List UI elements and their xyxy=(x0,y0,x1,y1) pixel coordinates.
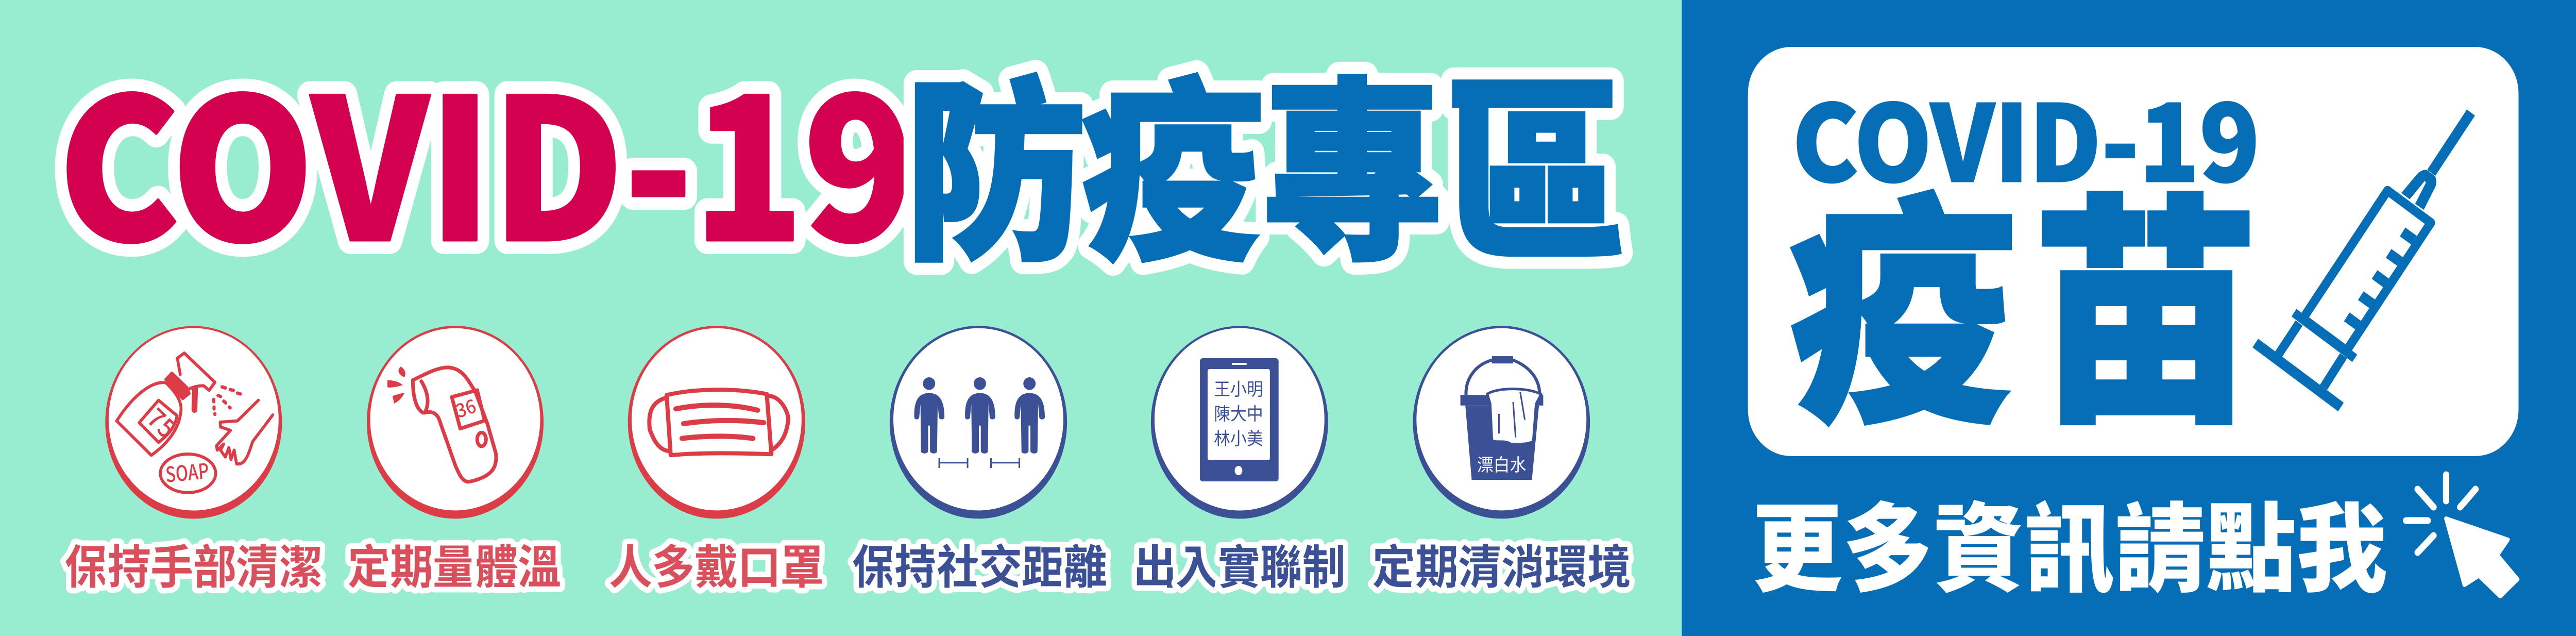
icon: bleach bucket with cloth xyxy=(1413,326,1590,518)
icon: three people keeping distance xyxy=(890,326,1067,518)
panel: vaccine call to action xyxy=(1682,0,2576,636)
labels under icons: 出入實聯制 xyxy=(1133,530,1346,597)
icon: forehead thermometer xyxy=(367,326,544,518)
icon: click cursor xyxy=(2406,475,2518,596)
labels under icons xyxy=(65,530,1631,597)
labels under icons: 保持手部清潔 xyxy=(65,530,323,597)
labels under icons: 定期量體溫 xyxy=(348,530,561,597)
labels under icons: 人多戴口罩 xyxy=(609,530,824,597)
heading: COVID-19 防疫專區: COVID-19 xyxy=(58,14,914,296)
icon: forehead thermometer: 36 xyxy=(452,392,479,424)
text: more info: 更多資訊請點我 xyxy=(1752,472,2387,612)
icon: phone with name list: 林小美 xyxy=(1214,425,1263,450)
card: vaccine: 疫苗 xyxy=(1789,120,2259,470)
card: vaccine: COVID-19 xyxy=(1792,60,2260,212)
icon: hand sanitizer and soap: SOAP xyxy=(164,455,210,489)
heading: COVID-19 防疫專區: 防疫專區 xyxy=(904,16,1626,298)
icon: hand sanitizer and soap xyxy=(105,326,282,518)
icon: phone with name list xyxy=(1151,326,1328,518)
heading: COVID-19 防疫專區: COVID-19 xyxy=(58,14,914,296)
icon: phone with name list: 王小明 xyxy=(1214,376,1263,400)
icon: hand sanitizer and soap: 75 xyxy=(141,398,184,446)
heading: COVID-19 防疫專區 xyxy=(58,14,1626,298)
icon: face mask xyxy=(628,326,805,518)
icon: phone with name list: 陳大中 xyxy=(1214,400,1263,425)
labels under icons: 定期清消環境 xyxy=(1372,530,1631,597)
icon: syringe xyxy=(2256,112,2471,407)
labels under icons: 保持社交距離 xyxy=(852,530,1107,597)
icon: bleach bucket with cloth: 漂白水 xyxy=(1477,451,1527,476)
card: vaccine xyxy=(1748,47,2518,470)
heading: COVID-19 防疫專區: 防疫專區 xyxy=(904,16,1626,298)
